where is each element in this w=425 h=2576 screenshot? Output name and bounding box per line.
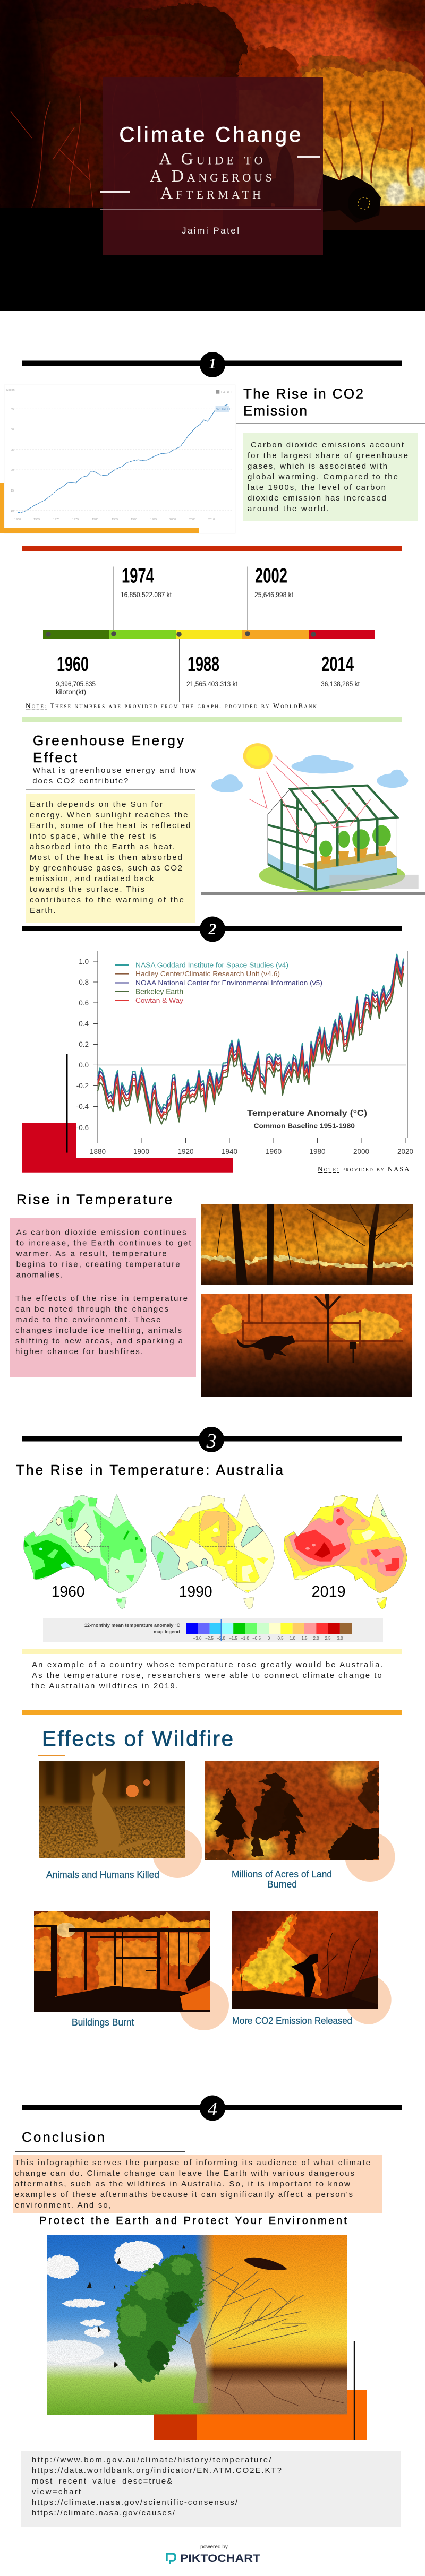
green text box: around the world. <box>248 504 328 513</box>
section 2 divider <box>22 916 402 942</box>
temperature anomaly chart: 2020 <box>397 1148 413 1156</box>
photo: firefighter <box>232 1911 378 2009</box>
line chart: world CO2: Million <box>6 389 15 392</box>
heading: protect the earth: Protect the Earth and Protect Your Environment <box>39 2215 347 2227</box>
title: Climate Change <box>119 123 301 147</box>
yellow text box: emission, and radiated back <box>30 874 154 883</box>
line chart: world CO2: 2000 <box>169 518 176 521</box>
timeline 1974: 1974 <box>122 565 154 587</box>
label: more CO2: More CO2 Emission Released <box>232 2015 352 2026</box>
pink text box: to increase, the Earth continues to get <box>16 1239 191 1247</box>
heading: rise in temperature: Rise in Temperature <box>16 1191 172 1207</box>
temperature anomaly chart: 1960 <box>266 1148 282 1156</box>
map legend: 2.5 <box>325 1636 331 1641</box>
section 3 divider <box>22 1427 402 1452</box>
line chart: world CO2: LABEL <box>221 391 233 394</box>
chart legend: Cowtan & Way <box>135 996 184 1004</box>
sources box: https://data.worldbank.org/indicator/EN.ATM.CO2E.KT? <box>32 2466 282 2475</box>
title panel <box>100 77 323 255</box>
pink text box: warmer. As a result, temperature <box>16 1250 167 1258</box>
timeline 1960 <box>56 653 96 696</box>
pink text box: higher chance for bushfires. <box>15 1347 143 1356</box>
map legend: 1.0 <box>290 1636 296 1641</box>
source note NASA: Note: <box>318 1165 339 1173</box>
temperature anomaly chart: 1880 <box>90 1148 106 1156</box>
map legend: map legend <box>154 1629 180 1634</box>
yellow text box: into space, while the rest is <box>30 832 156 841</box>
temperature anomaly chart: 2000 <box>353 1148 369 1156</box>
map year labels <box>52 1583 346 1600</box>
temperature anomaly chart: 1900 <box>133 1148 149 1156</box>
label: millions of acres <box>232 1869 332 1890</box>
chart legend: NOAA National Center for Environmental Information (v5) <box>135 979 322 987</box>
section 4 divider <box>22 2096 402 2121</box>
timeline <box>43 565 375 702</box>
footer: powered by piktochart <box>167 2544 260 2564</box>
map legend: −2.5 <box>205 1636 214 1641</box>
timeline 1988 <box>186 653 237 688</box>
line chart: world CO2: 30 <box>11 428 14 432</box>
line chart: world CO2: 20 <box>11 469 14 472</box>
hero: wildfire photo <box>0 0 425 230</box>
subtitle: Aftermath <box>160 183 261 202</box>
line chart: world CO2: 1965 <box>33 518 40 521</box>
peach conclusion box: examples of these aftermaths because it can significantly affect a person's <box>15 2190 353 2199</box>
sources box: https://climate.nasa.gov/causes/ <box>32 2509 175 2518</box>
pink text box: As carbon dioxide emission continues <box>16 1228 186 1237</box>
map legend: −1.5 <box>229 1636 237 1641</box>
timeline 2002: 25,646,998 kt <box>254 590 293 599</box>
watermark <box>329 875 419 889</box>
map legend <box>43 1618 383 1642</box>
photo: burning forest <box>201 1204 413 1285</box>
heading: greenhouse energy effect <box>33 733 184 765</box>
heading: conclusion: Conclusion <box>22 2129 105 2145</box>
line chart: world CO2: 1985 <box>112 518 118 521</box>
peach conclusion box: This infographic serves the purpose of informing its audience of what climate <box>15 2158 370 2167</box>
line chart: world CO2: WORLD <box>216 408 230 411</box>
map legend: 1.5 <box>301 1636 308 1641</box>
label: buildings burnt: Buildings Burnt <box>72 2017 134 2028</box>
gray ground bar <box>201 891 425 895</box>
Australia explanation <box>32 1660 383 1691</box>
section 1 divider: 1 <box>209 356 216 372</box>
yellow text box: towards the surface. This <box>30 885 144 894</box>
map legend: −0.5 <box>252 1636 261 1641</box>
source note NASA: provided by NASA <box>342 1165 410 1173</box>
map year labels: 1960 <box>52 1583 85 1600</box>
section 1 divider <box>22 352 402 377</box>
Australia explanation: As the temperature rose, researchers were able to connect climate change to <box>32 1671 382 1680</box>
icon: ground <box>259 859 405 892</box>
pink text box: made to the environment. These <box>15 1315 160 1324</box>
photo: kangaroo and burning house <box>201 1294 412 1397</box>
line chart: world CO2 <box>4 385 235 533</box>
greenhouse question: What is greenhouse energy and how <box>33 766 196 775</box>
temperature anomaly chart: 0.8 <box>79 978 89 986</box>
line chart: world CO2: 35 <box>11 408 14 411</box>
line chart: world CO2: 1980 <box>92 518 98 521</box>
yellow text box: Earth, some of the heat is reflected <box>30 821 191 830</box>
subtitle <box>150 149 272 202</box>
sources box: http://www.bom.gov.au/climate/history/temperature/ <box>32 2456 271 2465</box>
green text box: gases, which is associated with <box>248 462 387 471</box>
map legend: 0.5 <box>277 1636 284 1641</box>
green text box: for the largest share of greenhouse <box>248 451 408 460</box>
icon: red heat rays <box>249 756 371 843</box>
heading: greenhouse energy effect: Greenhouse Energy <box>33 733 184 748</box>
timeline 2014: 2014 <box>321 653 354 676</box>
temperature anomaly chart: 1940 <box>222 1148 237 1156</box>
chart caption <box>247 1109 367 1130</box>
timeline 1960: kiloton(kt) <box>56 687 86 696</box>
pink text box: can be noted through the changes <box>15 1305 168 1314</box>
peach circles behind photos <box>152 1828 395 1882</box>
chart caption: Common Baseline 1951-1980 <box>254 1122 355 1130</box>
section 4 divider: 4 <box>208 2098 217 2120</box>
footer: powered by piktochart: powered by <box>200 2544 228 2550</box>
line chart: world CO2: 1960 <box>14 518 21 521</box>
map legend: −1.0 <box>241 1636 249 1641</box>
sources box: https://climate.nasa.gov/scientific-consensus/ <box>32 2498 238 2507</box>
yellow text box: Earth. <box>30 906 55 915</box>
footer: powered by piktochart: PIKTOCHART <box>180 2553 260 2564</box>
temperature anomaly chart: 0.6 <box>79 999 89 1007</box>
temperature anomaly chart: 1920 <box>177 1148 194 1156</box>
green text box: dioxide emission has increased <box>248 494 386 503</box>
line chart: world CO2: 2005 <box>189 518 196 521</box>
section 3 divider: 3 <box>206 1430 217 1452</box>
label: animals and humans killed: Animals and Humans Killed <box>46 1869 159 1880</box>
heading: rise in CO2: Emission <box>243 402 307 418</box>
label: millions of acres: Burned <box>267 1879 297 1890</box>
map year labels: 1990 <box>179 1583 212 1600</box>
line chart: world CO2: 1970 <box>53 518 60 521</box>
yellow text box: energy. When sunlight reaches the <box>30 811 188 820</box>
subtitle: A Guide to <box>159 149 262 168</box>
timeline 1974 <box>121 565 172 599</box>
chart legend: NASA Goddard Institute for Space Studies (v4) <box>135 961 288 969</box>
photo: half green half barren tree <box>47 2235 347 2415</box>
timeline 1988: 1988 <box>188 653 219 676</box>
pink text box <box>10 1218 196 1377</box>
label: millions of acres: Millions of Acres of Land <box>232 1869 332 1880</box>
map 1960 <box>23 1494 147 1609</box>
source note worldbank: Note: <box>26 702 47 710</box>
heading: Australia: The Rise in Temperature: Australia <box>16 1462 284 1478</box>
peach conclusion box: environment. And so, <box>15 2201 111 2210</box>
green text box: late 1900s, the level of carbon <box>248 483 386 492</box>
line chart: world CO2: 1990 <box>131 518 137 521</box>
orange corner block <box>197 2390 367 2440</box>
peach conclusion box: change can do. Climate change can leave the Earth with various dangerous <box>15 2169 354 2178</box>
chart legend: Hadley Center/Climatic Research Unit (v4.6) <box>135 970 280 978</box>
chart legend: Berkeley Earth <box>135 987 183 996</box>
chart legend <box>115 961 322 1004</box>
temperature anomaly chart: -0.6 <box>76 1124 89 1132</box>
chart caption: Temperature Anomaly (°C) <box>247 1109 367 1118</box>
pink text box: begins to rise, creating temperature <box>16 1260 180 1269</box>
temperature anomaly chart: -0.4 <box>76 1102 89 1110</box>
timeline 2014 <box>321 653 360 688</box>
heading: greenhouse energy effect: Effect <box>33 749 78 765</box>
timeline 1960: 9,396,705.835 <box>56 679 96 688</box>
temperature anomaly chart: 0.0 <box>79 1061 89 1069</box>
map legend: −2.0 <box>217 1636 225 1641</box>
temperature anomaly chart <box>76 951 413 1156</box>
photo: kangaroo <box>39 1761 185 1858</box>
peach conclusion box: aftermaths, such as the wildfires in Australia. So, it is important to know <box>15 2179 350 2189</box>
timeline 1988: 21,565,403.313 kt <box>186 679 237 688</box>
line chart: world CO2: 10 <box>11 510 14 513</box>
sources box: view=chart <box>32 2487 81 2496</box>
temperature anomaly chart: 0.4 <box>79 1020 89 1028</box>
orange corner bracket <box>0 483 199 533</box>
pink text box: changes include ice melting, animals <box>15 1326 182 1335</box>
map legend: 12-monthly mean temperature anomaly °C <box>84 1623 180 1628</box>
author: Jaimi Patel <box>182 226 239 236</box>
heading: rise in CO2 <box>243 385 363 418</box>
heading: rise in CO2: The Rise in CO2 <box>243 385 363 401</box>
timeline 1960: 1960 <box>57 653 89 676</box>
source note worldbank: These numbers are provided from the graph. provided by WorldBank <box>50 702 317 710</box>
yellow text box: Earth depends on the Sun for <box>30 800 163 809</box>
line chart: world CO2: 1995 <box>150 518 157 521</box>
pink text box: shifting to new areas, and sparking a <box>15 1337 183 1346</box>
yellow text box: by greenhouse gases, such as CO2 <box>30 864 182 873</box>
photo: burning building <box>34 1911 210 2012</box>
line chart: world CO2: 1975 <box>72 518 79 521</box>
timeline 2002 <box>254 565 293 599</box>
temperature series <box>98 954 403 1124</box>
Australia explanation: the Australian wildfires in 2019. <box>32 1682 178 1691</box>
icon: clouds <box>211 755 408 792</box>
greenhouse question <box>32 766 196 786</box>
yellow text box <box>26 794 195 923</box>
greenhouse illustration <box>211 743 419 892</box>
yellow text box: Most of the heat is then absorbed <box>30 853 182 862</box>
map legend: 0 <box>268 1636 270 1641</box>
temperature anomaly chart: 1980 <box>309 1148 326 1156</box>
section 2 divider: 2 <box>208 920 217 938</box>
icon: greenhouse <box>268 786 397 890</box>
subtitle: A Dangerous <box>150 166 272 185</box>
map 2019 <box>284 1494 407 1609</box>
temperature anomaly chart: -0.2 <box>76 1082 89 1090</box>
temperature anomaly chart: 1.0 <box>79 958 89 966</box>
heading: effects of wildfire: Effects of Wildfire <box>42 1727 233 1751</box>
hero black band <box>0 208 425 311</box>
line chart: world CO2: 2010 <box>208 518 215 521</box>
peach conclusion box <box>13 2155 382 2213</box>
green text box: global warming. Compared to the <box>248 472 398 481</box>
red corner block <box>22 1123 233 1173</box>
greenhouse question: does CO2 contribute? <box>32 777 128 786</box>
timeline 2002: 2002 <box>255 565 287 587</box>
line chart: world CO2: 15 <box>11 489 14 493</box>
peach circles over lower photos <box>179 1975 392 2030</box>
map legend: 2.0 <box>313 1636 319 1641</box>
map legend: −3.0 <box>193 1636 202 1641</box>
timeline 1974: 16,850,522.087 kt <box>121 590 172 599</box>
map legend: 3.0 <box>337 1636 343 1641</box>
Australia explanation: An example of a country whose temperature rose greatly would be Australia. <box>32 1660 383 1669</box>
line chart: world CO2: 25 <box>11 449 14 452</box>
sources box <box>21 2451 401 2527</box>
map 1990 <box>151 1494 275 1609</box>
sources box: most_recent_value_desc=true& <box>32 2477 172 2486</box>
photo: burning pine forest <box>205 1761 379 1860</box>
timeline 2014: 36,138,285 kt <box>321 679 360 688</box>
map year labels: 2019 <box>312 1583 346 1600</box>
yellow text box: absorbed into the Earth as heat. <box>30 842 175 851</box>
icon: sun <box>243 743 273 769</box>
icon: piktochart logo <box>167 2554 175 2564</box>
temperature anomaly chart: 0.2 <box>79 1040 89 1048</box>
yellow text box: contributes to the warming of the <box>30 895 184 904</box>
green text box: Carbon dioxide emissions account <box>251 441 404 450</box>
pink text box: anomalies. <box>16 1271 63 1279</box>
green text box <box>243 433 418 521</box>
pink text box: The effects of the rise in temperature <box>15 1294 188 1303</box>
